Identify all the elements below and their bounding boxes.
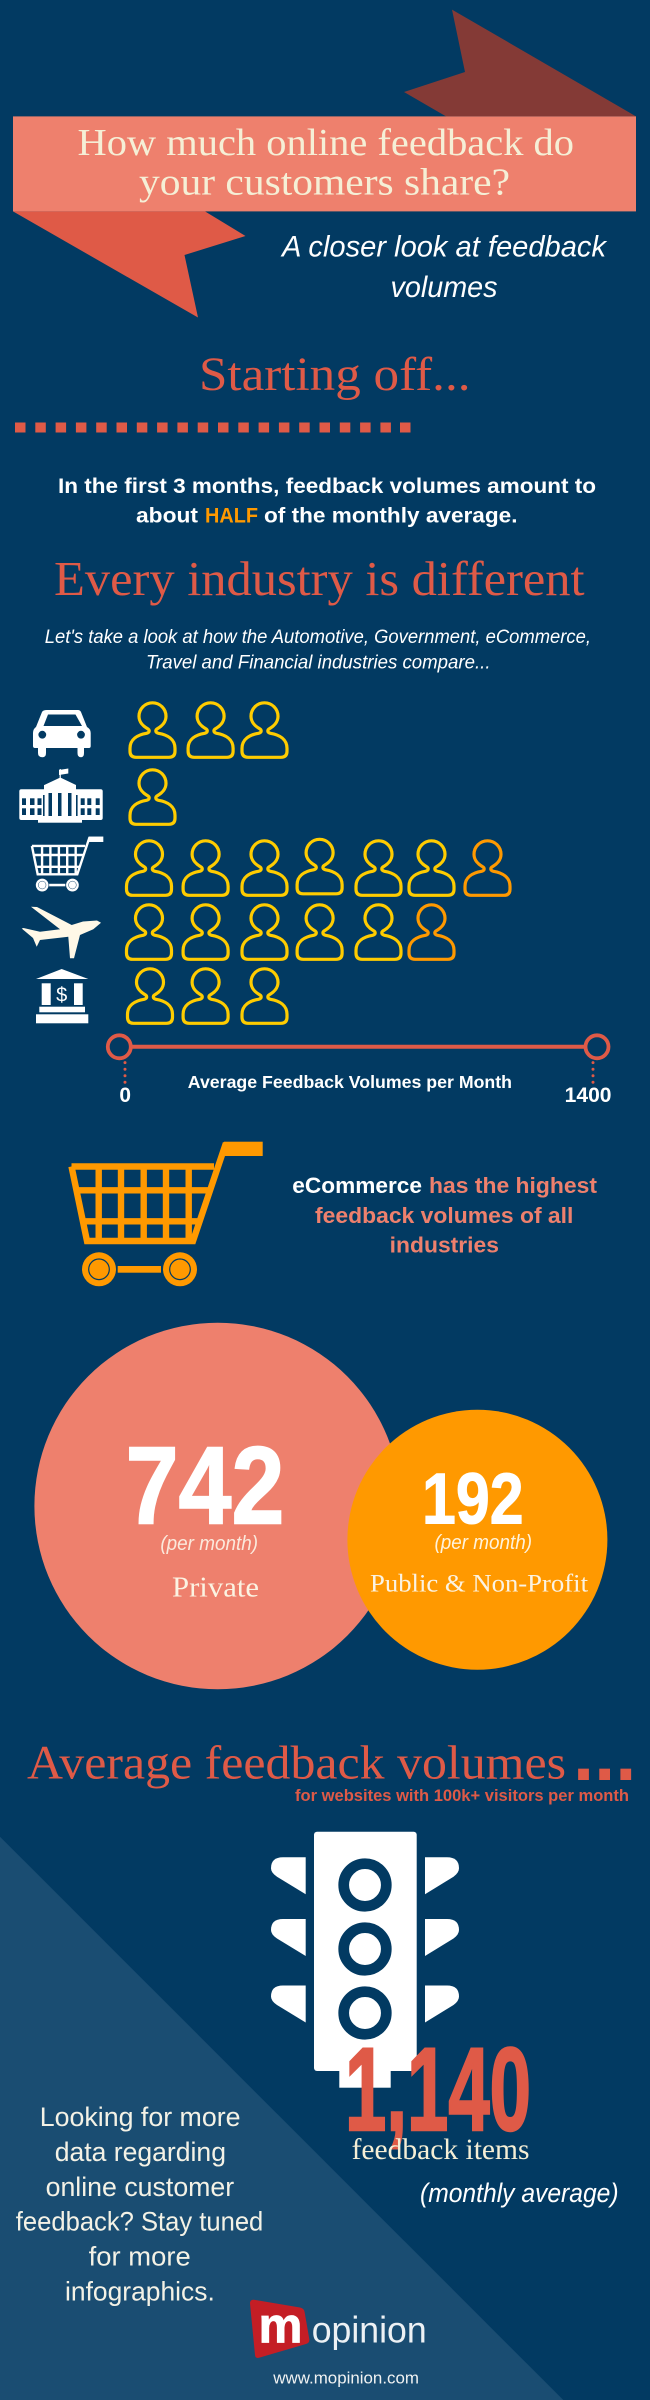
- intro statement: HALF: [205, 504, 258, 527]
- row: automotive: [130, 703, 287, 757]
- title: [78, 122, 574, 204]
- circle: private: Private: [172, 1572, 259, 1604]
- ribbon fold: bottom left: [13, 211, 246, 318]
- closing message: infographics.: [65, 2277, 215, 2307]
- heading: average feedback volumes: ...: [573, 1712, 636, 1797]
- title ribbon: [13, 10, 636, 317]
- eCommerce callout: industries: [390, 1232, 499, 1258]
- intro statement: of the monthly average.: [264, 504, 518, 527]
- industry intro text: [45, 627, 591, 674]
- heading: average feedback volumes: for websites with 100k+ visitors per month: [295, 1786, 629, 1805]
- closing message: online customer: [46, 2172, 234, 2202]
- axis: average feedback volumes per month: [108, 1035, 612, 1107]
- heading: average feedback volumes: Average feedback volumes: [27, 1737, 566, 1790]
- heading: every industry is different: Every industry is different: [54, 551, 585, 606]
- intro statement: about: [136, 504, 198, 527]
- stat: 1,140 feedback items: feedback items: [352, 2133, 530, 2166]
- icon: bank: $: [56, 984, 67, 1006]
- eCommerce callout: feedback volumes of all: [315, 1203, 573, 1228]
- closing message: Looking for more: [40, 2102, 240, 2132]
- icon: government building: [19, 768, 103, 823]
- title: How much online feedback do: [78, 122, 574, 164]
- closing message: feedback? Stay tuned: [16, 2207, 263, 2237]
- eCommerce callout: eCommerce: [292, 1173, 422, 1198]
- circle: public and non-profit: (per month): [434, 1532, 532, 1554]
- heading: average feedback volumes: [27, 1712, 636, 1805]
- circle: public and non-profit: [347, 1410, 607, 1670]
- website url: www.mopinion.com: [272, 2368, 419, 2387]
- row: eCommerce: [126, 839, 510, 895]
- subtitle: [280, 230, 608, 304]
- ribbon fold: top right: [404, 10, 636, 116]
- closing message: [16, 2102, 263, 2307]
- stat: 1,140 feedback items: (monthly average): [420, 2178, 619, 2208]
- circle: private: [34, 1323, 401, 1689]
- industry intro text: Let's take a look at how the Automotive, Government, eCommerce,: [45, 627, 591, 648]
- title: your customers share?: [139, 162, 510, 204]
- eCommerce callout: [292, 1173, 598, 1258]
- icon: car: [33, 710, 91, 757]
- logo: mopinion: [250, 2297, 427, 2358]
- axis: average feedback volumes per month: 1400: [565, 1084, 612, 1107]
- lighter diagonal triangle panel: [0, 1837, 563, 2400]
- axis: average feedback volumes per month: 0: [119, 1084, 131, 1107]
- axis: average feedback volumes per month: Average Feedback Volumes per Month: [188, 1072, 512, 1092]
- ribbon band: [13, 116, 636, 211]
- closing message: for more: [89, 2242, 191, 2272]
- row: travel: [126, 905, 454, 959]
- subtitle: A closer look at feedback: [280, 230, 608, 264]
- icon: traffic light: [271, 1832, 459, 2088]
- stat: 1,140 feedback items: [345, 2024, 619, 2208]
- icon: large shopping cart: [72, 1142, 263, 1286]
- circle: public and non-profit: 192: [422, 1459, 524, 1539]
- dotted divider: [15, 422, 410, 432]
- intro statement: In the first 3 months, feedback volumes amount to: [58, 475, 596, 498]
- closing message: data regarding: [55, 2137, 226, 2167]
- circle: private: (per month): [160, 1533, 258, 1555]
- icon: shopping cart: [32, 837, 103, 891]
- heading: starting off: Starting off...: [199, 348, 470, 401]
- intro statement: [58, 475, 596, 527]
- pictogram chart: feedback by industry: [19, 703, 510, 1023]
- row: government: [130, 770, 175, 824]
- circle: public and non-profit: Public & Non-Profit: [370, 1571, 588, 1598]
- circle: private: 742: [126, 1424, 284, 1547]
- icon: airplane: [22, 907, 101, 958]
- logo: mopinion: opinion: [312, 2309, 427, 2350]
- subtitle: volumes: [390, 271, 498, 304]
- eCommerce callout: has the highest: [429, 1173, 598, 1198]
- row: financial: [128, 969, 287, 1023]
- icon: bank: [36, 969, 88, 1023]
- stat: 1,140 feedback items: 1,140: [345, 2024, 531, 2156]
- logo: mopinion: m: [258, 2297, 302, 2353]
- industry intro text: Travel and Financial industries compare...: [146, 653, 490, 674]
